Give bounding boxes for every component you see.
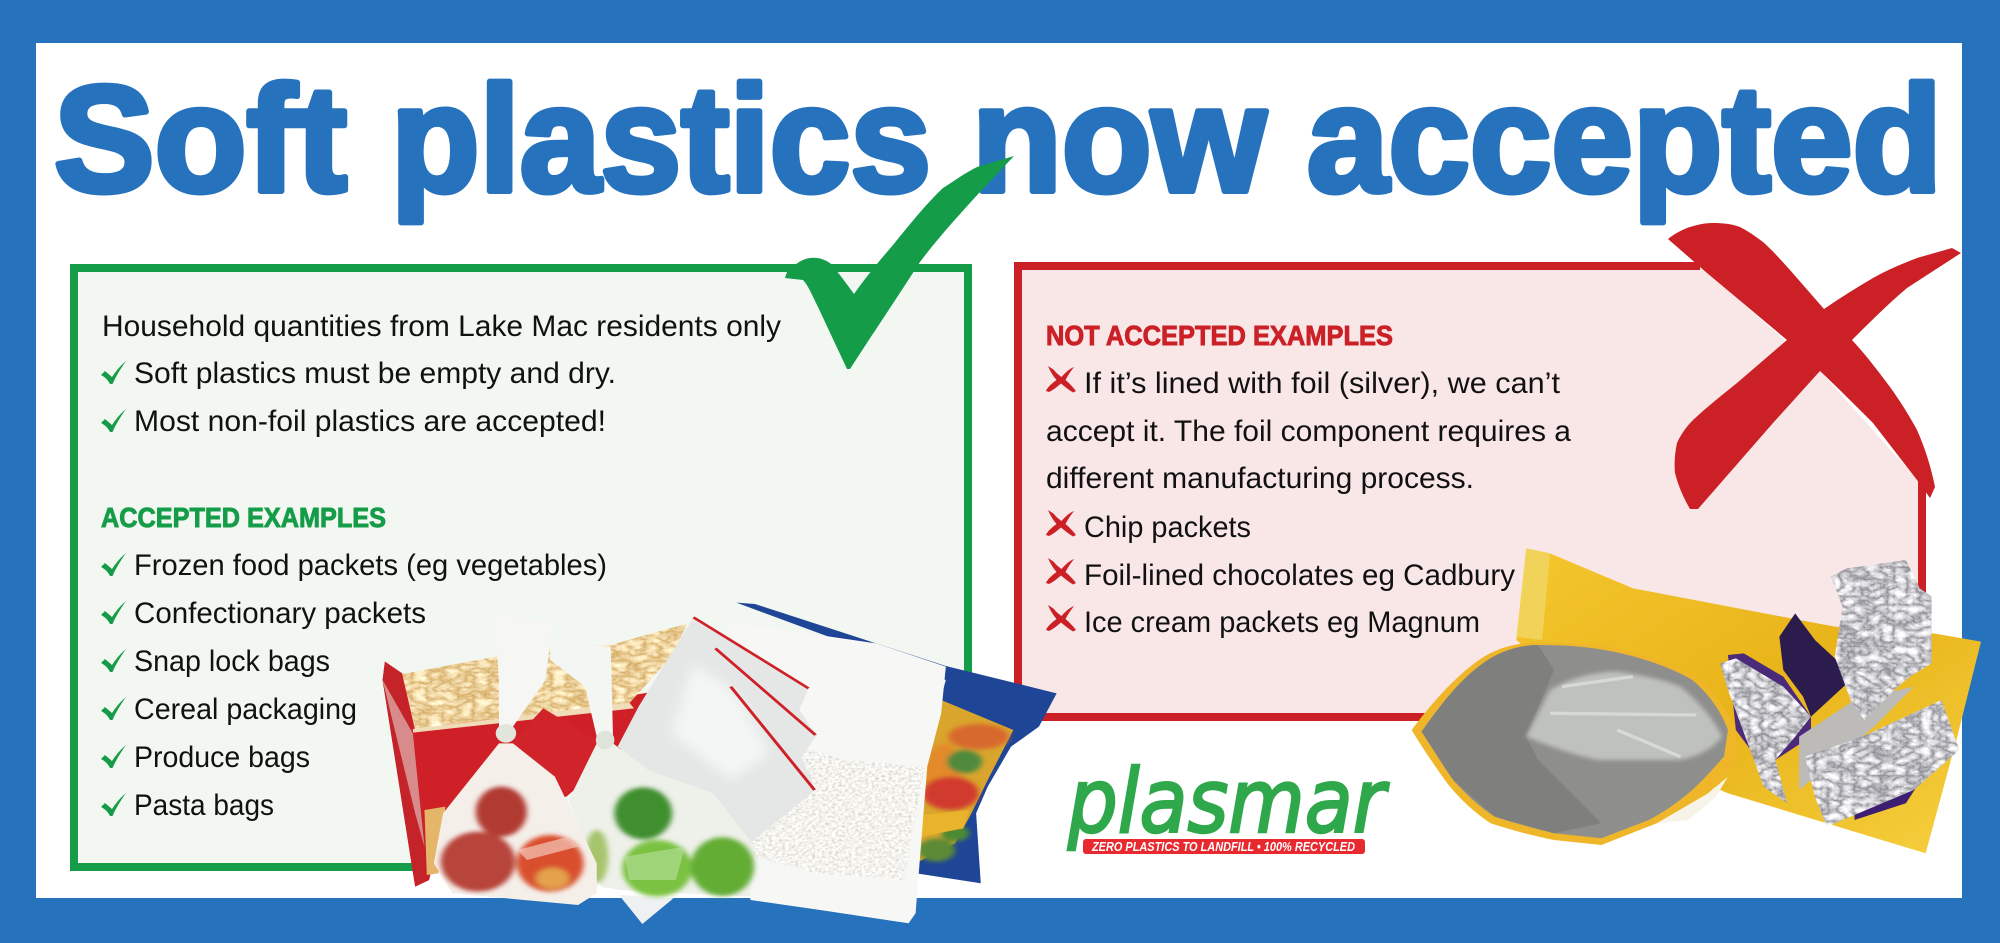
logo: plasmar: plasmar [1067,750,1389,853]
crinkled wrapper ends [1516,548,1550,640]
rice bag [727,622,946,923]
title: now [972,54,1267,223]
logo: plasmar: ZERO PLASTICS TO LANDFILL • 100% RECYCLED [1091,840,1355,854]
text block: accepted intro: Household quantities from Lake Mac residents only [102,310,781,343]
snap lock bag [618,617,817,843]
icon: large green check [785,156,1014,369]
list: accepted examples: Snap lock bags [134,645,330,678]
icon: large red cross [1668,223,1961,509]
list: accepted examples [101,549,607,822]
list: not accepted examples: accept it. The foil component requires a [1046,415,1572,448]
text block: accepted intro [101,310,781,438]
list: accepted examples: Cereal packaging [134,693,357,726]
foil wrappers [1720,560,1959,827]
chip packet [1412,643,1738,845]
panel: accepted [74,268,968,867]
yellow wrapper [1516,548,1981,853]
title: Soft [54,54,347,223]
list: not accepted examples: different manufacturing process. [1046,462,1474,495]
photo: not accepted foil packets [1412,548,1981,853]
bag corner over border [619,895,674,924]
list: not accepted examples: If it’s lined with foil (silver), we can’t [1084,367,1560,400]
text block: accepted intro: Soft plastics must be empty and dry. [134,357,616,390]
title: plastics [391,54,931,223]
list: not accepted examples: Foil-lined chocolates eg Cadbury [1084,559,1515,592]
red diamond backing [511,708,599,795]
list: accepted examples: Produce bags [134,741,310,774]
frozen vegetable bag [736,603,1057,883]
heading: not accepted examples: NOT ACCEPTED EXAMPLES [1046,320,1393,351]
pasta box [383,623,694,887]
text block: accepted intro: Most non-foil plastics are accepted! [134,405,606,438]
list: not accepted examples: Ice cream packets eg Magnum [1084,606,1480,639]
panel: not accepted [1018,266,1922,717]
list: accepted examples: Frozen food packets (eg vegetables) [134,549,607,582]
title [54,54,1942,223]
photo: accepted soft plastics [383,603,1057,924]
list: not accepted examples: Chip packets [1084,511,1251,544]
produce bag with green apples [550,645,755,897]
list: accepted examples: Pasta bags [134,789,274,822]
produce bag with red apples [434,613,614,905]
title: accepted [1307,54,1942,223]
list: not accepted examples [1046,366,1572,639]
list: accepted examples: Confectionary packets [134,597,426,630]
heading: accepted examples: ACCEPTED EXAMPLES [101,502,386,533]
